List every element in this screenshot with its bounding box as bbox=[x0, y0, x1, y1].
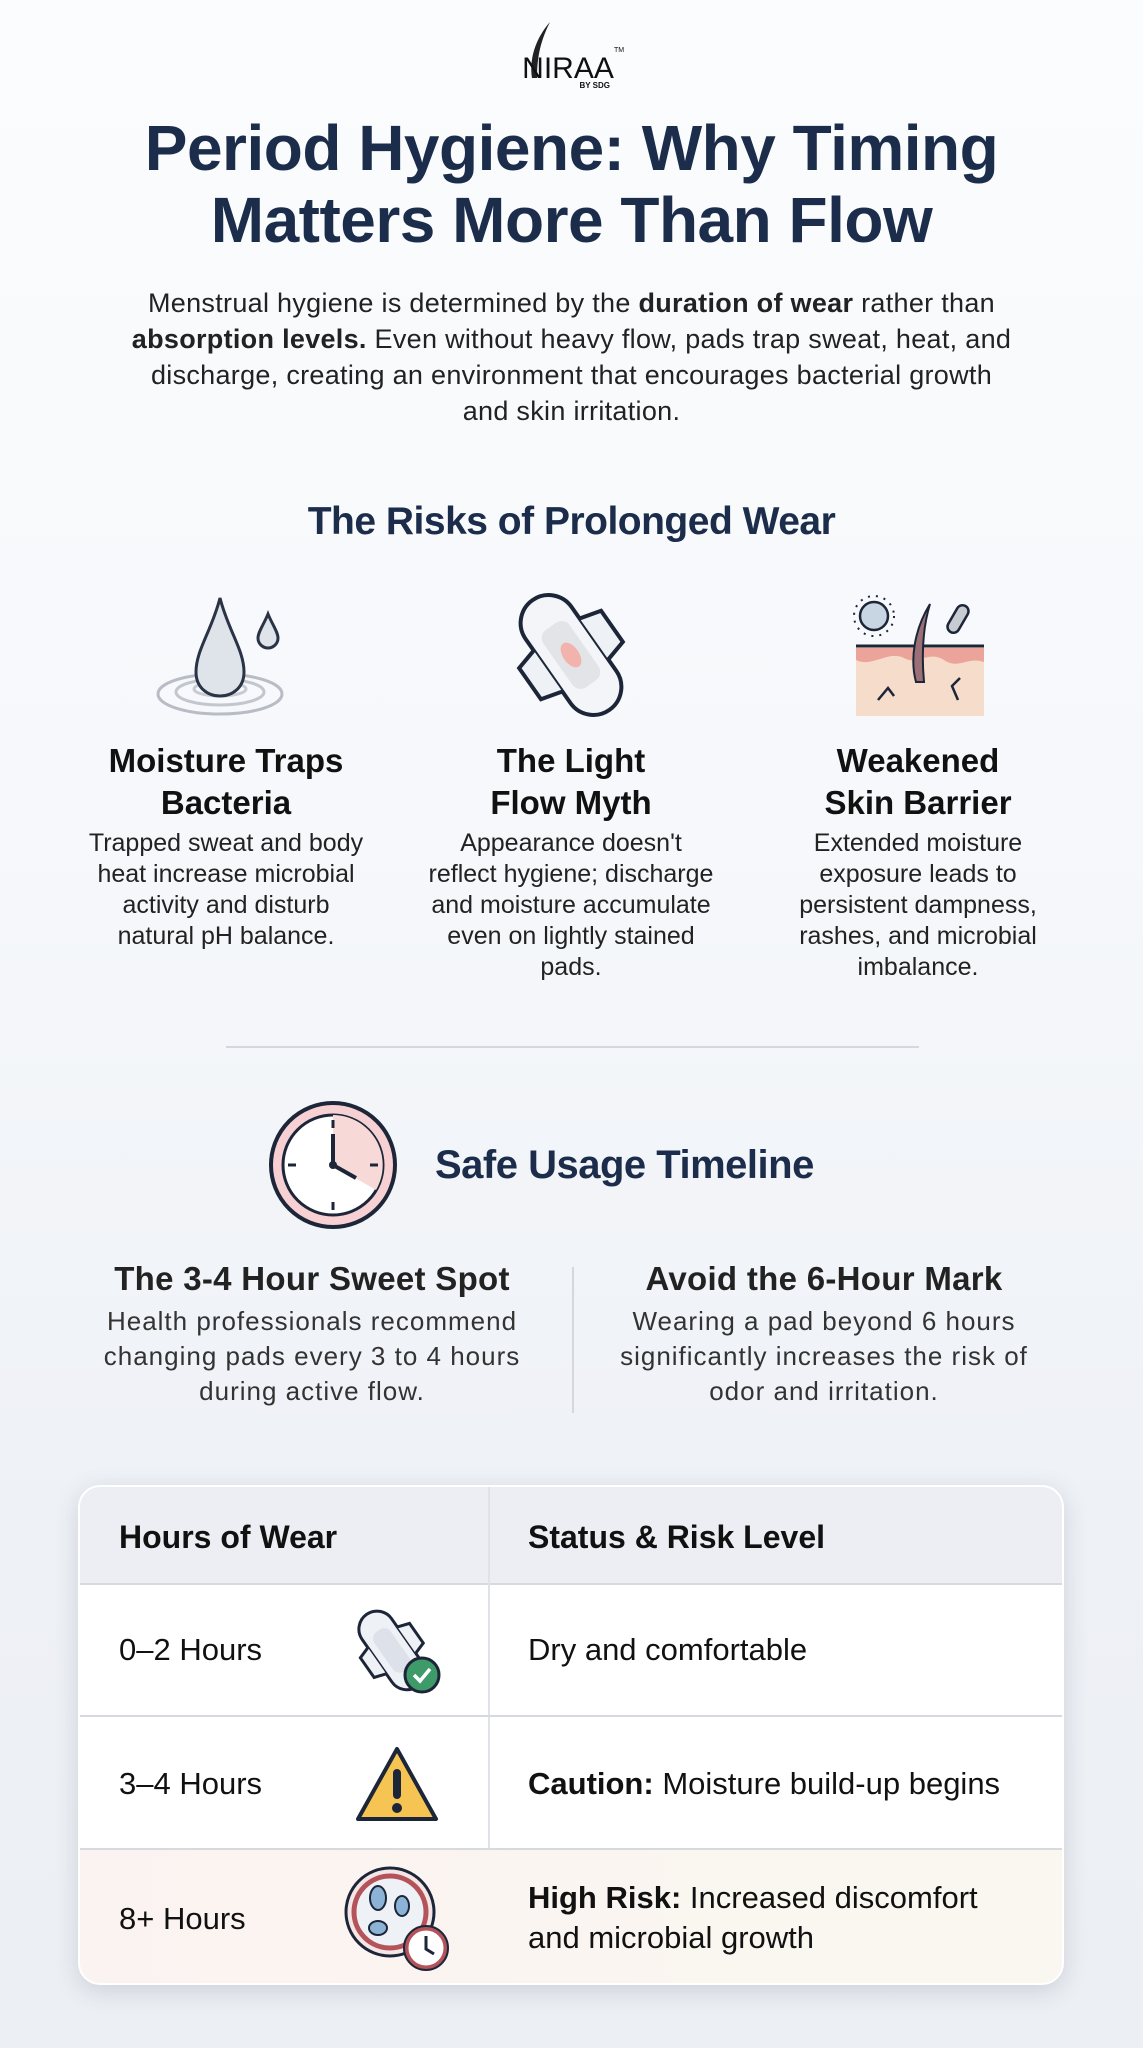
row: 3-4 hours bbox=[80, 1717, 1066, 1850]
description: even on lightly stained bbox=[447, 922, 695, 950]
title bbox=[145, 112, 998, 256]
timeline column: 6-hour mark: odor and irritation. bbox=[709, 1376, 939, 1406]
table header bbox=[80, 1487, 1066, 1585]
row: 8+ hours: 8+ Hours bbox=[119, 1901, 246, 1936]
table header: Status & Risk Level bbox=[528, 1519, 825, 1555]
description: heat increase microbial bbox=[97, 860, 355, 888]
icon: pad bbox=[516, 593, 626, 717]
heading: Skin Barrier bbox=[824, 784, 1012, 821]
description: and moisture accumulate bbox=[431, 891, 711, 919]
timeline column: 6-hour mark: significantly increases the risk of bbox=[620, 1341, 1028, 1371]
icon: skin with bacteria bbox=[853, 595, 984, 716]
intro paragraph: and skin irritation. bbox=[463, 396, 680, 426]
heading bbox=[109, 742, 343, 821]
timeline column: sweet spot: during active flow. bbox=[199, 1376, 425, 1406]
icon: water drop bbox=[156, 598, 284, 716]
section heading: risks: The Risks of Prolonged Wear bbox=[308, 500, 835, 543]
heading bbox=[824, 742, 1012, 821]
timeline column: sweet spot: Health professionals recommend bbox=[107, 1306, 517, 1336]
panel: moisture traps bacteria bbox=[89, 598, 363, 950]
description: natural pH balance. bbox=[118, 922, 334, 950]
intro paragraph: Menstrual hygiene is determined by the duration of wear rather than bbox=[148, 288, 995, 318]
heading: Flow Myth bbox=[490, 784, 652, 821]
description: Appearance doesn't bbox=[460, 829, 682, 857]
description bbox=[799, 829, 1037, 981]
icon: bacteria with clock bbox=[344, 1866, 449, 1971]
row: 8+ hours: High Risk: Increased discomfort bbox=[528, 1880, 978, 1915]
description bbox=[89, 829, 363, 950]
description: persistent dampness, bbox=[799, 891, 1037, 919]
heading: Weakened bbox=[837, 742, 999, 779]
description: Extended moisture bbox=[814, 829, 1022, 857]
timeline column: 6-hour mark bbox=[620, 1260, 1028, 1406]
timeline column: sweet spot bbox=[104, 1260, 520, 1406]
description: pads. bbox=[540, 953, 602, 981]
intro paragraph: discharge, creating an environment that encourages bacterial growth bbox=[151, 360, 992, 390]
timeline column: sweet spot: changing pads every 3 to 4 hours bbox=[104, 1341, 520, 1371]
row: 0-2 hours bbox=[80, 1585, 1066, 1717]
heading: Bacteria bbox=[161, 784, 291, 821]
title: Period Hygiene: Why Timing bbox=[145, 112, 998, 184]
panel: weakened skin barrier bbox=[799, 595, 1037, 981]
heading: Moisture Traps bbox=[109, 742, 343, 779]
heading: The Light bbox=[497, 742, 645, 779]
row: 0-2 hours: Dry and comfortable bbox=[528, 1632, 807, 1667]
icon: pad with check bbox=[357, 1610, 440, 1694]
intro paragraph bbox=[132, 288, 1011, 426]
table bbox=[78, 1485, 1064, 1985]
timeline column: 6-hour mark: Avoid the 6-Hour Mark bbox=[645, 1260, 1003, 1297]
logo bbox=[522, 22, 624, 90]
description: Trapped sweat and body bbox=[89, 829, 363, 857]
row: 8+ hours bbox=[80, 1850, 1066, 1987]
description: reflect hygiene; discharge bbox=[429, 860, 713, 888]
heading bbox=[490, 742, 652, 821]
logo: TM bbox=[614, 47, 624, 54]
icon: clock bbox=[269, 1101, 397, 1229]
row: 3-4 hours: 3–4 Hours bbox=[119, 1766, 262, 1801]
section heading: timeline: Safe Usage Timeline bbox=[435, 1143, 814, 1187]
row: 0-2 hours: 0–2 Hours bbox=[119, 1632, 262, 1667]
panel: light flow myth bbox=[429, 593, 713, 981]
description: imbalance. bbox=[858, 953, 978, 981]
intro paragraph: absorption levels. Even without heavy flow, pads trap sweat, heat, and bbox=[132, 324, 1011, 354]
table header: Hours of Wear bbox=[119, 1519, 337, 1555]
row: 3-4 hours: Caution: Moisture build-up begins bbox=[528, 1766, 1000, 1801]
logo: BY SDG bbox=[579, 81, 610, 90]
description: exposure leads to bbox=[819, 860, 1017, 888]
icon: warning bbox=[356, 1746, 438, 1821]
description: activity and disturb bbox=[122, 891, 330, 919]
description bbox=[429, 829, 713, 981]
title: Matters More Than Flow bbox=[211, 184, 932, 256]
timeline column: sweet spot: The 3-4 Hour Sweet Spot bbox=[114, 1260, 510, 1297]
logo: NIRAA bbox=[522, 52, 614, 85]
timeline column: 6-hour mark: Wearing a pad beyond 6 hours bbox=[632, 1306, 1016, 1336]
description: rashes, and microbial bbox=[799, 922, 1037, 950]
row: 8+ hours: and microbial growth bbox=[528, 1920, 814, 1955]
